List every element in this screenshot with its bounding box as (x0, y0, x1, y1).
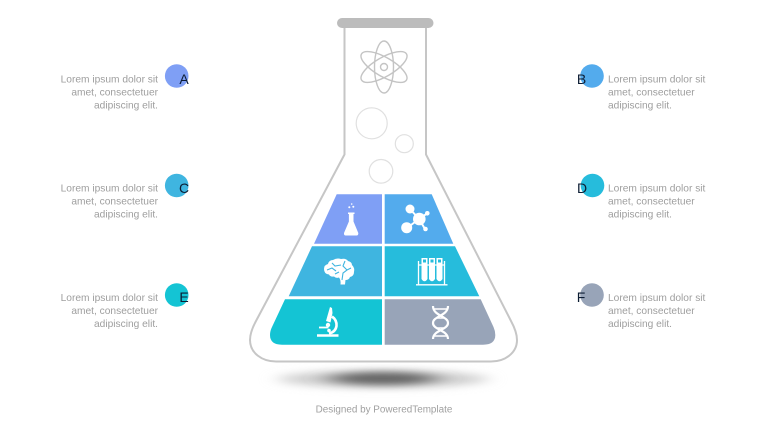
credit text: Designed by PoweredTemplate (316, 404, 453, 416)
callout F: Lorem ipsum dolor sit (608, 293, 706, 304)
callout B (577, 64, 706, 112)
callout D: Lorem ipsum dolor sit (608, 184, 706, 194)
icon: brain (324, 258, 354, 284)
flask cap (337, 18, 434, 28)
callout F: F (577, 289, 585, 305)
callout D: D (577, 180, 587, 196)
callout A: Lorem ipsum dolor sit (61, 74, 158, 86)
callout E: Lorem ipsum dolor sit (61, 293, 158, 304)
callout E (61, 283, 189, 330)
cell D (385, 246, 479, 296)
callout B: Lorem ipsum dolor sit (608, 74, 706, 86)
bubbles (356, 108, 413, 183)
flask liquid grid (270, 194, 495, 345)
callout C: adipiscing elit. (94, 210, 158, 220)
icon: atom (357, 41, 411, 93)
callout B: adipiscing elit. (608, 100, 672, 112)
callout A: adipiscing elit. (94, 100, 158, 112)
flask shadow (278, 370, 488, 388)
callout E: amet, consectetuer (71, 306, 159, 317)
callout F (577, 283, 706, 330)
cell B (385, 194, 453, 244)
icon: flask (344, 203, 358, 236)
callout C: C (179, 180, 189, 196)
callout F: adipiscing elit. (608, 319, 672, 330)
callout B: amet, consectetuer (608, 88, 695, 98)
cell F (385, 299, 495, 345)
icon: microscope (317, 307, 338, 336)
callout A: A (179, 71, 189, 87)
cell A (314, 194, 382, 244)
callout C: amet, consectetuer (71, 196, 159, 208)
callout F: amet, consectetuer (608, 306, 695, 317)
cell C (289, 246, 382, 296)
cell E (270, 299, 382, 345)
callout C (61, 174, 189, 220)
icon: DNA helix (433, 306, 448, 339)
callout D: amet, consectetuer (608, 196, 695, 208)
flask outline (250, 18, 517, 362)
callout C: Lorem ipsum dolor sit (61, 184, 158, 194)
callout D (577, 174, 706, 220)
callout A: amet, consectetuer (71, 88, 159, 98)
callout B: B (577, 71, 586, 87)
icon: molecule (401, 204, 430, 233)
callout E: E (179, 289, 189, 305)
callout E: adipiscing elit. (94, 319, 158, 330)
icon: test tubes (416, 258, 448, 285)
callout A (61, 64, 189, 112)
callout D: adipiscing elit. (608, 210, 672, 220)
